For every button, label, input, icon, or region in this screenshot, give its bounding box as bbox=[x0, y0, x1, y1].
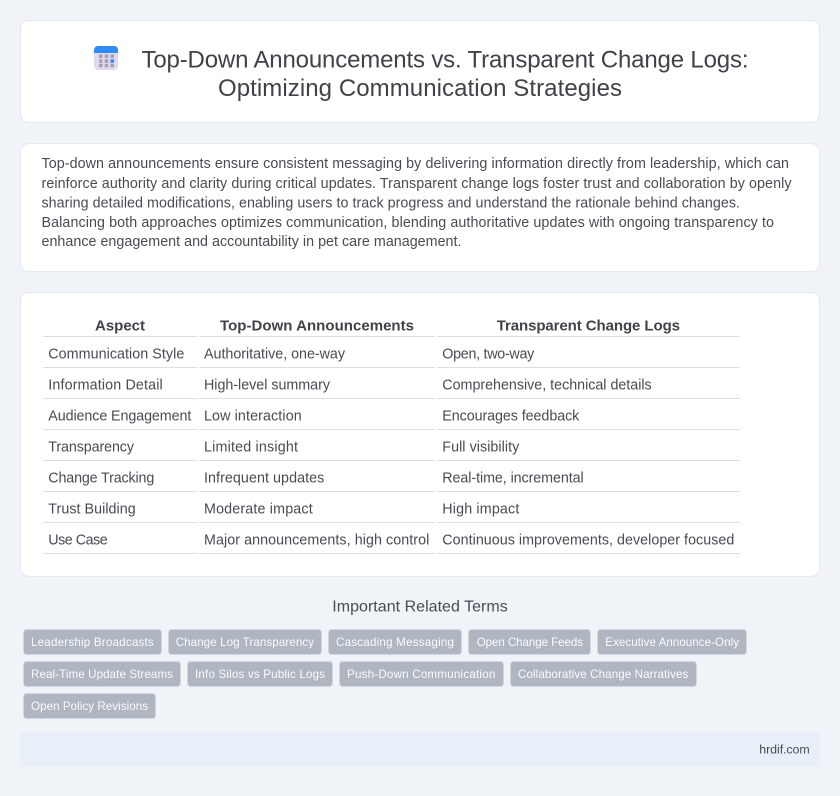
row: Trust Building bbox=[43, 501, 740, 523]
heading: important related terms: Important Related Terms bbox=[332, 599, 508, 616]
row: Transparency: Transparency bbox=[48, 439, 135, 455]
row: Transparency bbox=[43, 439, 740, 461]
panel: introduction text: Balancing both approaches optimizes communication, blending authoritative updates with ongoing transparency to bbox=[42, 215, 774, 231]
title bbox=[142, 46, 748, 102]
tag: Executive Announce-Only bbox=[598, 630, 746, 654]
tag: Cascading Messaging bbox=[328, 630, 462, 654]
title: Top-Down Announcements vs. Transparent Change Logs: bbox=[142, 46, 748, 74]
panel: related term tags bbox=[24, 630, 746, 718]
row: Trust Building: Moderate impact bbox=[204, 501, 313, 517]
row: Use Case: Use Case bbox=[48, 532, 108, 548]
row: Change Tracking bbox=[43, 470, 740, 492]
row: Communication Style: Authoritative, one-way bbox=[204, 346, 346, 362]
tag: Executive Announce-Only: Executive Announce-Only bbox=[605, 636, 739, 649]
footer: hrdif.com bbox=[759, 742, 810, 756]
row: Change Tracking: Infrequent updates bbox=[204, 470, 324, 486]
panel: introduction text bbox=[20, 144, 820, 272]
tag: Open Change Feeds bbox=[468, 630, 590, 654]
row: Information Detail: High-level summary bbox=[204, 377, 331, 393]
tag: Open Policy Revisions bbox=[24, 694, 156, 718]
table header row: Transparent Change Logs bbox=[497, 318, 680, 335]
row: Trust Building: High impact bbox=[442, 501, 519, 517]
row: Use Case: Continuous improvements, developer focused bbox=[442, 532, 734, 548]
row: Information Detail: Comprehensive, technical details bbox=[442, 377, 652, 393]
panel: introduction text: reinforce authority and clarity during critical updates. Transparent change logs foster trust and collaboration by openly bbox=[42, 176, 792, 192]
panel: introduction text: enhance engagement and accountability in pet care management. bbox=[42, 234, 462, 250]
tag: Collaborative Change Narratives bbox=[510, 662, 696, 686]
tag: Info Silos vs Public Logs bbox=[188, 662, 332, 686]
row: Communication Style bbox=[43, 346, 740, 368]
tag: Info Silos vs Public Logs: Info Silos vs Public Logs bbox=[195, 668, 325, 681]
row: Information Detail: Information Detail bbox=[48, 377, 163, 393]
panel: introduction text: Top-down announcements ensure consistent messaging by delivering information directly from leadership, which can bbox=[42, 156, 789, 172]
tag: Change Log Transparency: Change Log Transparency bbox=[176, 636, 314, 649]
row: Use Case: Major announcements, high control bbox=[204, 532, 429, 548]
table header row: Aspect bbox=[95, 318, 145, 335]
tag: Open Change Feeds: Open Change Feeds bbox=[477, 636, 583, 649]
row: Transparency: Limited insight bbox=[204, 439, 298, 455]
row: Change Tracking: Change Tracking bbox=[48, 470, 154, 486]
tag: Real-Time Update Streams bbox=[24, 662, 180, 686]
tag: Collaborative Change Narratives: Collaborative Change Narratives bbox=[518, 668, 689, 681]
row: Communication Style: Communication Style bbox=[48, 346, 184, 362]
icon: calendar bbox=[94, 46, 118, 70]
row: Use Case bbox=[43, 532, 740, 554]
tag: Open Policy Revisions: Open Policy Revisions bbox=[31, 700, 148, 713]
row: Information Detail bbox=[43, 377, 740, 399]
panel: title header bbox=[20, 20, 820, 122]
tag: Leadership Broadcasts: Leadership Broadcasts bbox=[31, 636, 154, 649]
tag: Push-Down Communication: Push-Down Communication bbox=[347, 668, 495, 681]
title: Optimizing Communication Strategies bbox=[218, 75, 622, 102]
panel: introduction text: sharing detailed modifications, enabling users to track progress and understand the rationale behind changes. bbox=[42, 196, 740, 212]
tag: Change Log Transparency bbox=[168, 630, 322, 654]
panel: comparison table bbox=[20, 292, 820, 576]
tag: Leadership Broadcasts bbox=[24, 630, 162, 654]
row: Audience Engagement: Encourages feedback bbox=[442, 408, 580, 424]
row: Transparency: Full visibility bbox=[442, 439, 520, 455]
footer bbox=[20, 732, 820, 766]
row: Audience Engagement bbox=[43, 408, 740, 430]
table header row: Top-Down Announcements bbox=[220, 318, 414, 335]
row: Communication Style: Open, two-way bbox=[442, 346, 535, 362]
table header row bbox=[43, 318, 740, 337]
row: Audience Engagement: Audience Engagement bbox=[48, 408, 191, 424]
row: Change Tracking: Real-time, incremental bbox=[442, 470, 584, 486]
tag: Cascading Messaging: Cascading Messaging bbox=[336, 636, 454, 649]
row: Audience Engagement: Low interaction bbox=[204, 408, 302, 424]
tag: Real-Time Update Streams: Real-Time Update Streams bbox=[31, 668, 173, 681]
row: Trust Building: Trust Building bbox=[48, 501, 136, 517]
tag: Push-Down Communication bbox=[340, 662, 504, 686]
